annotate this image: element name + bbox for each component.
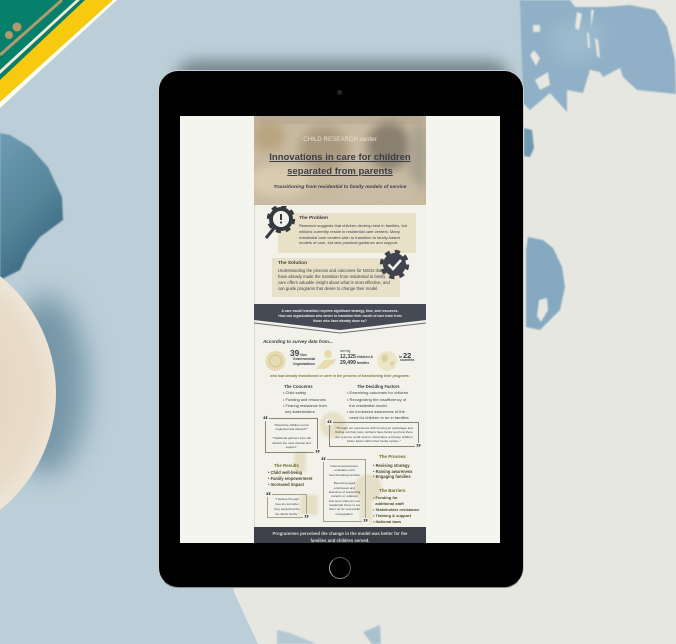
icon: solution gear with check (380, 250, 410, 280)
factors quote text: finding out that many orphans have family and how there (335, 430, 413, 434)
quote box: factors (329, 422, 419, 447)
barriers list (373, 495, 420, 524)
middle quote text: them up for successful (329, 507, 360, 511)
results list: • Family empowerment (268, 476, 312, 481)
barriers list: • Training & support (373, 513, 411, 518)
banner title: Innovations in care for children (269, 152, 411, 163)
the barriers heading: The Barriers (379, 488, 406, 493)
screen: infographic page (180, 116, 500, 543)
factors list: • Recognizing the insufficiency of (347, 397, 406, 402)
factors list: need for children to be in families (349, 415, 409, 420)
results quote text (274, 496, 300, 516)
process list: • Revising strategy (373, 463, 410, 468)
factors list: • An increased awareness of the (347, 409, 405, 414)
the results heading: The Results (274, 463, 299, 468)
stat: organisations caption: Organizations (293, 362, 315, 366)
middle quote text: employees and (334, 486, 355, 490)
banner text: A care model transition requires significant strategy, time, and resources. (282, 308, 398, 312)
factors list: the residential model (349, 403, 387, 408)
footer banner: families and children served. (310, 538, 370, 542)
factors quote text: are systems could work to reintroduce and keep children (335, 435, 413, 439)
plate shadow (3, 295, 87, 475)
solution text: care offers valuable insight about what is most effective, and (278, 280, 390, 285)
concerns list: key stakeholders (285, 409, 315, 414)
survey intro: According to survey data from... (263, 339, 333, 344)
stat: organisations: 39 Non (290, 348, 307, 358)
banner title: separated from parents (287, 166, 393, 177)
stat: children and families: 29,499 families (340, 360, 369, 366)
faint watermark figure (293, 411, 383, 525)
icon: globe (378, 351, 398, 371)
tablet (158, 70, 524, 588)
banner text (278, 308, 402, 323)
stat: organisations caption (293, 356, 315, 366)
results list (268, 470, 312, 487)
results quote text: they supported the (274, 506, 300, 510)
concerns list: • Fearing resistance from (283, 403, 327, 408)
banner brand line: CHILD RESEARCH center (303, 136, 377, 143)
banner title (269, 152, 411, 177)
icon: hand (316, 350, 337, 369)
results list: • Increased impact (268, 482, 304, 487)
stat: children and families (340, 349, 373, 366)
concerns quote text: "Traditional partners care still (272, 436, 311, 440)
home button (329, 557, 351, 579)
results quote text: "I believe through (275, 496, 299, 500)
solution heading: The Solution (278, 261, 307, 266)
process list (373, 463, 412, 479)
factors quote text (335, 426, 413, 443)
banner photo (254, 116, 426, 198)
concerns list: • Funding and resources (283, 397, 326, 402)
concerns list: • Child safety (283, 390, 306, 395)
banner text: those who have already done so? (313, 318, 367, 322)
dark chevron banner (254, 304, 426, 334)
book corner (0, 0, 117, 108)
barriers list: • Stakeholder resistance (373, 507, 419, 512)
factors quote text: better better within their family system." (347, 439, 401, 443)
problem text: residential care centers wish to transition to family-based (299, 235, 400, 240)
problem text: models of care, but lack practical guidance and support. (299, 240, 398, 245)
middle quote text: parents or relatives (331, 494, 358, 498)
middle quote text (328, 464, 360, 516)
infographic column background (254, 116, 426, 543)
tablet shadow (175, 60, 510, 120)
results quote text: love-ins and after (275, 502, 299, 506)
barriers list: • National laws (373, 519, 401, 524)
icon: organisations seal (266, 351, 286, 371)
icon: problem gear with magnifier (264, 206, 296, 239)
stat: children and families: serving (340, 349, 350, 353)
factors list (347, 390, 409, 420)
stat: countries: in 22 (399, 350, 411, 360)
camera (337, 90, 342, 95)
concerns quote text: support." (286, 445, 297, 449)
panel: the solution (272, 258, 400, 297)
middle quote text: branches of supporting (329, 490, 360, 494)
banner subtitle: Transitioning from residential to family models of service (273, 184, 407, 190)
panel: the problem (278, 213, 416, 253)
concerns quote text: "Would the children not be (274, 422, 309, 426)
middle quote text: evaluation and (334, 468, 355, 472)
middle quote text: reintegration. (335, 512, 354, 516)
middle quote text: Internal assessment, (330, 464, 359, 468)
stat: children and families: 12,325 children & (340, 354, 373, 360)
concerns quote text: attracts the most interest and (272, 441, 311, 445)
barriers list: additional staff (375, 501, 404, 506)
quote box: concerns (265, 418, 318, 453)
banner text: How can organizations who desire to transition their model of care learn from (278, 314, 402, 318)
header banner (254, 116, 426, 205)
solution text: Understanding the process and outcomes for NGOs that (278, 268, 383, 273)
results list: • Child well-being (268, 470, 302, 475)
middle quote text: Becoming aged (334, 481, 355, 485)
middle quote text: residential home to set (329, 503, 360, 507)
the deciding factors heading: The Deciding Factors (357, 384, 400, 389)
barriers list: • Funding for (373, 495, 398, 500)
problem heading: The Problem (299, 216, 328, 220)
factors list: • Examining outcomes for children (347, 390, 408, 395)
footer banner: Programmes perceived the change in the model was better for the (273, 530, 407, 536)
quote box: results (267, 494, 307, 518)
problem text: Research suggests that children develop best in families, but (299, 223, 407, 228)
stat: countries caption: countries (400, 358, 414, 362)
quote box: middle (323, 459, 366, 522)
problem text: millions currently reside in residential care centers. Many (299, 229, 400, 234)
process list: • Engaging families (373, 474, 411, 479)
factors quote text: "Through our experience with running an orphanage and (335, 426, 413, 430)
plate (0, 243, 56, 543)
concerns quote text: neglected and abused?" (275, 427, 308, 431)
the process heading: The Process (379, 454, 406, 459)
the concerns heading: The Concerns (284, 384, 313, 389)
middle quote text: and were placed in our (329, 499, 360, 503)
concerns list (283, 390, 327, 414)
solution text: can guide programs that desire to change their model. (278, 286, 378, 291)
middle quote text: benchmarking servlets (329, 473, 360, 477)
results quote text: the whole family." (275, 512, 299, 516)
process list: • Raising awareness (373, 469, 412, 474)
problem text (299, 223, 407, 245)
concerns quote text (272, 422, 311, 449)
survey caption: who had already transitioned or were in the process of transitioning their programs: (270, 374, 410, 378)
solution text (278, 268, 390, 291)
stat: organisations caption: Governmental (293, 356, 315, 360)
solution text: have already made the transition from residential to family (278, 274, 385, 279)
footer banner (254, 527, 426, 543)
